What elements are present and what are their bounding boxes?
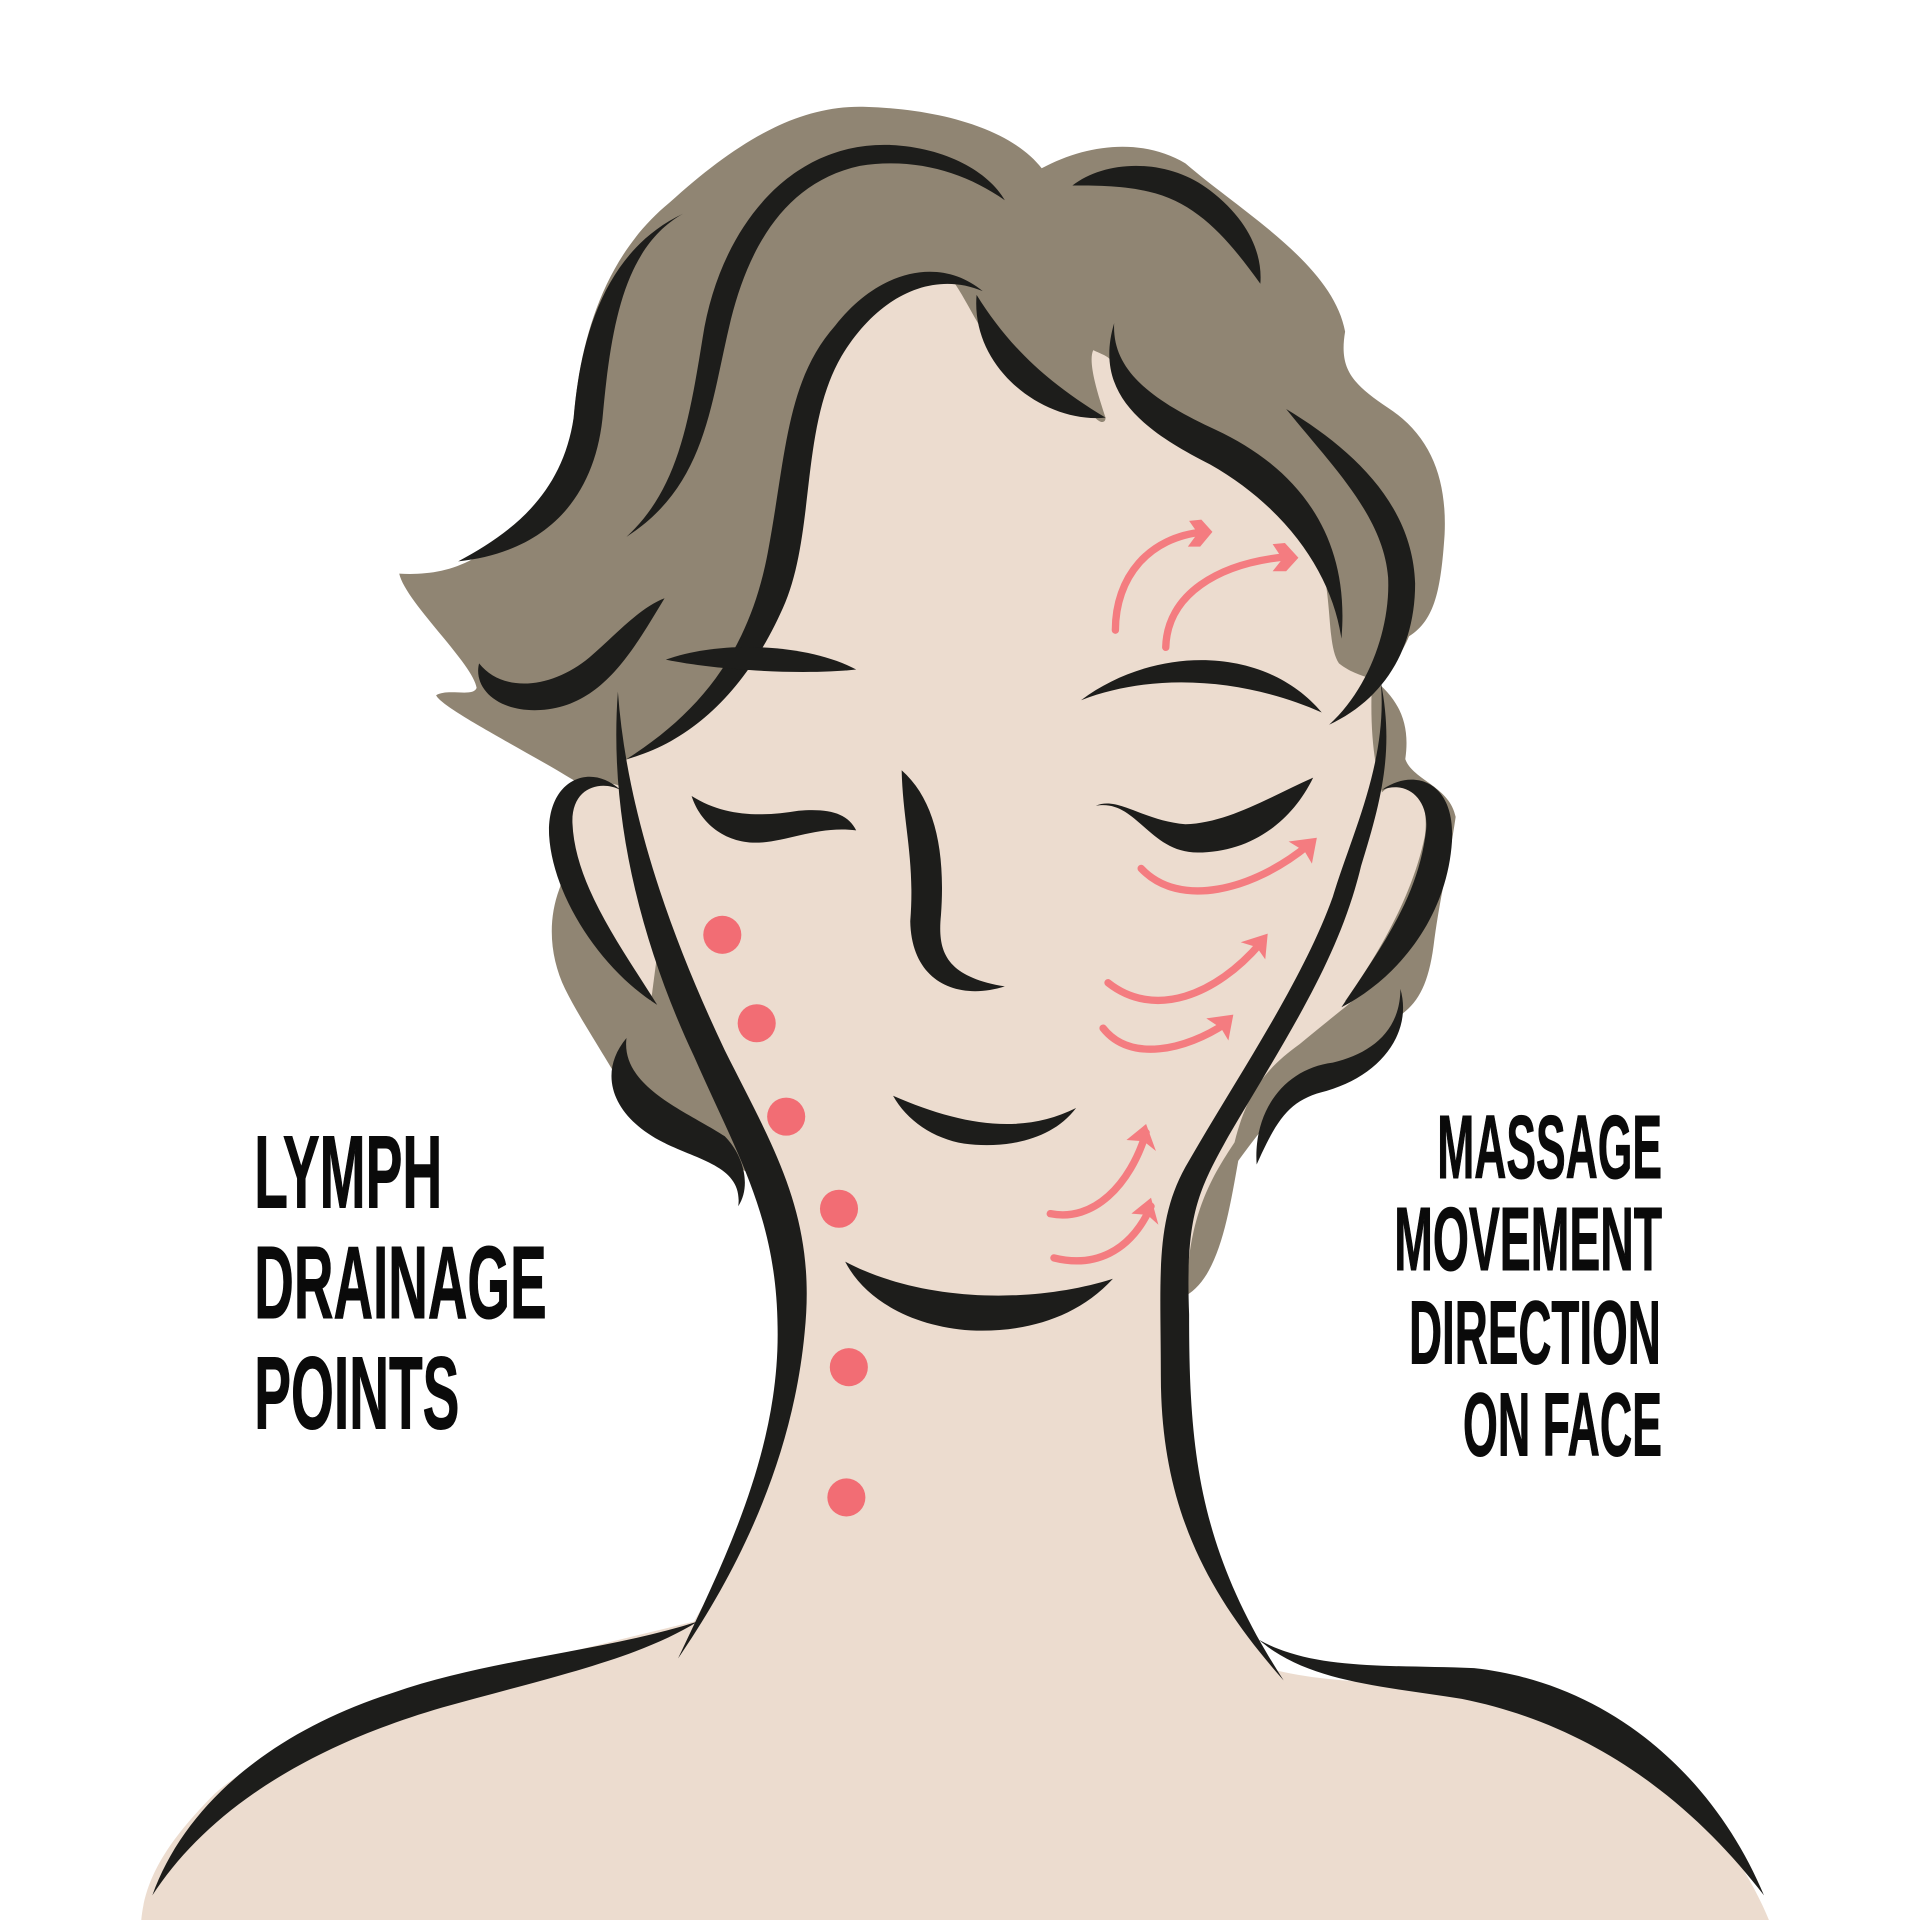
text: lymph drainage points: LYMPH (254, 1115, 442, 1230)
left jaw and neck line (616, 692, 807, 1658)
hair stroke: top right curl (1072, 166, 1261, 284)
arrow: cheek lower (1103, 1023, 1226, 1049)
arrow heads (1126, 520, 1317, 1225)
text: massage movement direction on face: DIRECTION (1409, 1284, 1661, 1384)
hair stroke: far-left curl (458, 214, 683, 561)
lymph drainage points (703, 916, 868, 1516)
left shoulder (152, 1621, 698, 1895)
text: massage movement direction on face: MOVEMENT (1394, 1190, 1662, 1290)
hair stroke: fringe curl (478, 598, 665, 710)
arrow: cheek upper (1108, 943, 1260, 1000)
right ear (1341, 780, 1452, 1007)
infographic illustration: MASSAGE (1437, 1098, 1662, 1198)
massage direction arrows (1050, 532, 1308, 1261)
arrow: jaw upper (1050, 1133, 1146, 1215)
right neck curl (1256, 989, 1403, 1165)
hair mass (399, 107, 1456, 1296)
hair stroke: centre curl (976, 295, 1106, 418)
arrow: under eye (1141, 845, 1308, 891)
hair stroke: far right curl (1286, 409, 1415, 725)
infographic illustration: ON FACE (1463, 1376, 1662, 1476)
mouth (893, 1096, 1076, 1145)
text: lymph drainage points (254, 1115, 547, 1451)
right shoulder (1259, 1640, 1764, 1895)
left neck curl (611, 1038, 745, 1206)
black outline strokes (152, 145, 1764, 1895)
right jaw and neck line (1160, 682, 1386, 1680)
hair stroke: left wave (626, 145, 1005, 537)
arrow: forehead upper (1115, 532, 1204, 630)
left eye (692, 796, 856, 843)
nose (902, 770, 1005, 991)
arrow: jaw lower (1054, 1206, 1151, 1261)
hair stroke: hairline left (626, 272, 983, 759)
text: lymph drainage points: POINTS (254, 1336, 459, 1451)
hair stroke: right sweep (1109, 323, 1342, 639)
left ear (549, 777, 657, 1005)
face and neck skin (141, 275, 1769, 1920)
text: massage movement direction on face (1394, 1098, 1662, 1476)
arrow: forehead lower (1166, 556, 1290, 647)
ear left skin (567, 783, 669, 1001)
right eye (1096, 778, 1313, 853)
chin (845, 1262, 1113, 1331)
right eyebrow (1081, 660, 1322, 712)
text: lymph drainage points: DRAINAGE (254, 1225, 547, 1340)
left eyebrow (666, 647, 856, 672)
